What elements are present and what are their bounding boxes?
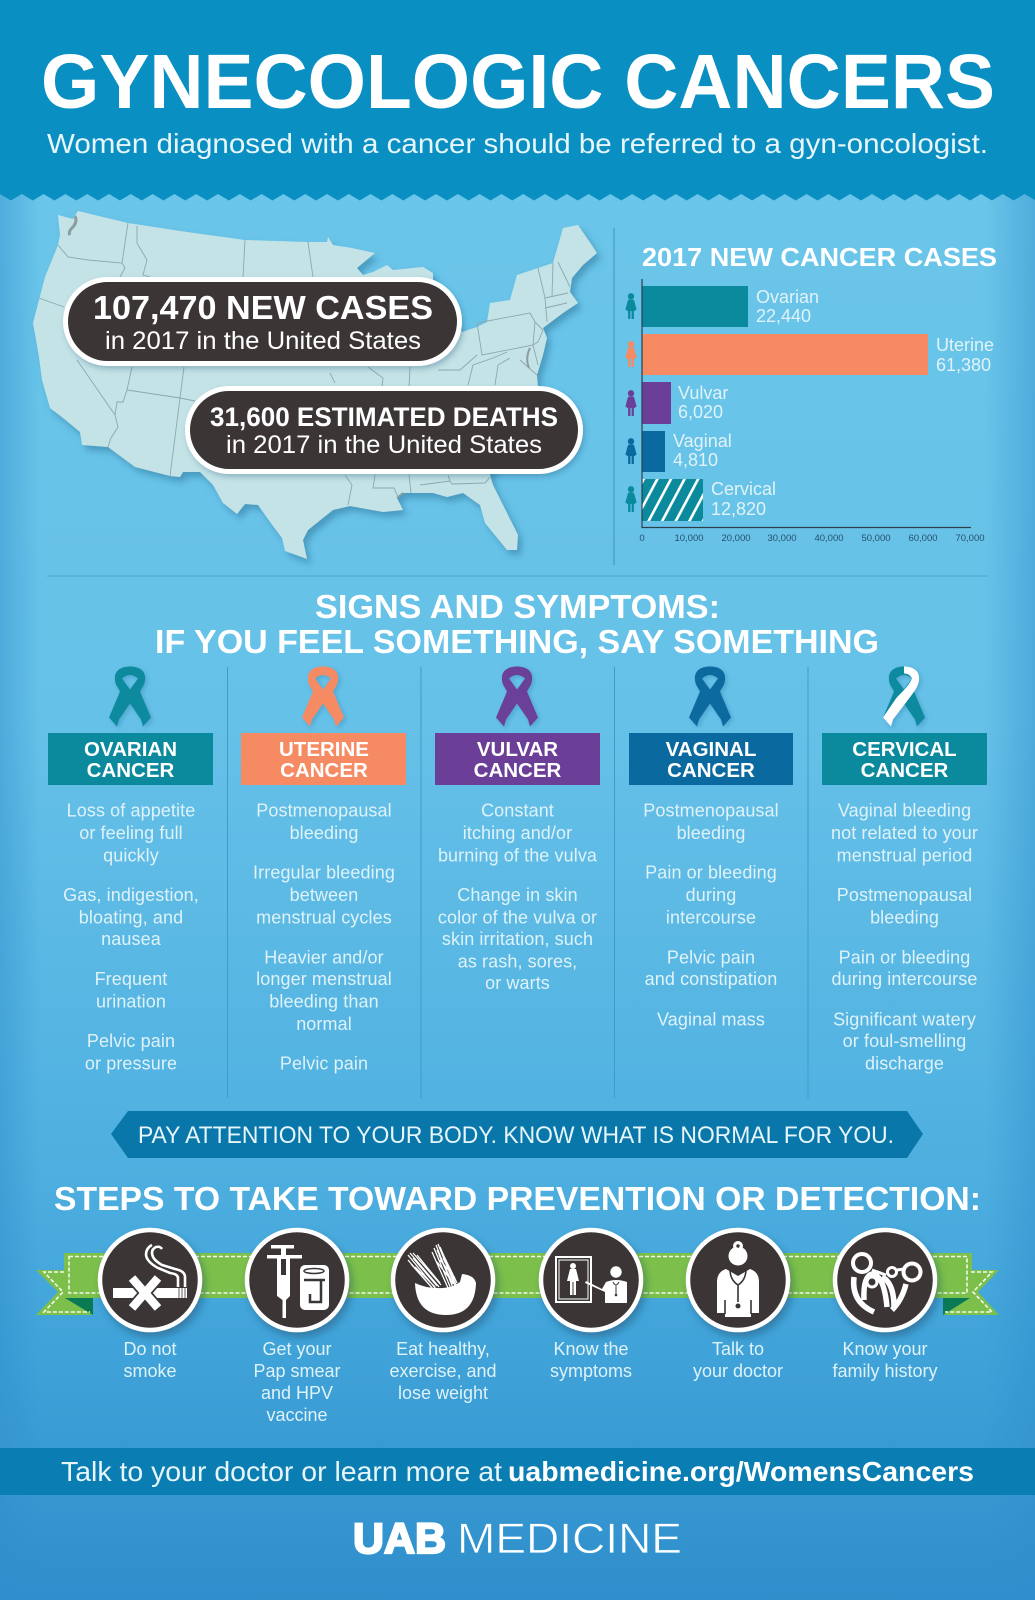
- callout: new cases: 107,470 NEW CASES: [93, 290, 433, 327]
- step: eat healthy: Eat healthy,: [396, 1339, 490, 1359]
- title: GYNECOLOGIC CANCERS: [41, 39, 995, 125]
- ovarian label: CANCER: [87, 759, 175, 782]
- uterine symptoms: bleeding than: [269, 991, 379, 1011]
- cervical symptoms: discharge: [865, 1054, 944, 1074]
- icon: vaginal ribbon: [689, 666, 731, 726]
- bar labels: 6,020: [678, 402, 723, 422]
- cervical symptoms: during intercourse: [832, 969, 977, 989]
- axis labels: 10,000: [674, 533, 704, 544]
- ovarian symptoms: Frequent: [95, 969, 167, 989]
- green ribbon: [36, 1253, 999, 1315]
- ovarian symptoms: urination: [96, 991, 166, 1011]
- vulvar label: [435, 733, 600, 785]
- bar labels: 12,820: [711, 499, 766, 519]
- cervical label: CERVICAL: [852, 738, 957, 761]
- vaginal symptoms: bleeding: [677, 823, 745, 843]
- callout: estimated deaths: [188, 388, 580, 472]
- ovarian symptoms: Gas, indigestion,: [63, 885, 199, 905]
- ovarian symptoms: Loss of appetite: [67, 800, 195, 820]
- icon: cervical ribbon: [883, 666, 925, 726]
- bar labels: Cervical: [711, 479, 776, 499]
- bars: [642, 286, 928, 521]
- icon: doctor and chart: [541, 1230, 641, 1330]
- callout: new cases: in 2017 in the United States: [105, 327, 421, 355]
- vulvar symptoms: itching and/or: [463, 823, 572, 843]
- banner: pay attention: PAY ATTENTION TO YOUR BODY. KNOW WHAT IS NORMAL FOR YOU.: [138, 1122, 894, 1149]
- panel: 2017 new cancer cases chart: [625, 242, 997, 544]
- cervical symptoms: Significant watery: [833, 1010, 976, 1030]
- ovarian symptoms: or feeling full: [79, 823, 183, 843]
- panel: vaginal cancer: [629, 666, 793, 1030]
- icon: doctor: [688, 1230, 788, 1330]
- cervical symptoms: Pain or bleeding: [839, 947, 970, 967]
- logo: UAB Medicine: UAB: [353, 1515, 446, 1563]
- vulvar symptoms: or warts: [485, 973, 550, 993]
- vulvar symptoms: skin irritation, such: [442, 929, 593, 949]
- heading: signs and symptoms: IF YOU FEEL SOMETHING, SAY SOMETHING: [155, 623, 879, 660]
- US map: [33, 211, 597, 559]
- step: pap smear and vaccine: vaccine: [266, 1405, 328, 1425]
- ovarian symptoms: bloating, and: [79, 908, 183, 928]
- bar labels: 22,440: [756, 306, 811, 326]
- cervical label: [822, 733, 987, 785]
- ovarian symptoms: quickly: [103, 845, 159, 865]
- axis labels: 0: [639, 533, 645, 544]
- vulvar symptoms: as rash, sores,: [458, 952, 577, 972]
- axis labels: [639, 533, 985, 544]
- icon: syringe and vial: [247, 1230, 347, 1330]
- panel: cervical cancer: [822, 666, 987, 1074]
- step: pap smear and vaccine: Pap smear: [253, 1361, 341, 1381]
- vaginal symptoms: and constipation: [645, 969, 777, 989]
- bar labels: Uterine: [936, 335, 994, 355]
- step: do not smoke: [100, 1230, 200, 1381]
- person icons: [625, 293, 637, 512]
- heading: steps: STEPS TO TAKE TOWARD PREVENTION OR DETECTION:: [54, 1180, 981, 1217]
- step: pap smear and vaccine: [247, 1230, 347, 1425]
- header band: [0, 0, 1035, 200]
- vulvar symptoms: Constant: [481, 800, 554, 820]
- heading: signs and symptoms: SIGNS AND SYMPTOMS:: [315, 588, 720, 625]
- axes: [642, 279, 971, 528]
- step: eat healthy: [389, 1230, 497, 1403]
- axis labels: 20,000: [721, 533, 751, 544]
- step: talk to your doctor: [688, 1230, 788, 1381]
- step: talk to your doctor: your doctor: [693, 1361, 783, 1381]
- icon: uterine ribbon: [302, 666, 344, 726]
- vaginal symptoms: Pain or bleeding: [645, 863, 777, 883]
- cervical label: CANCER: [861, 759, 949, 782]
- logo: UAB Medicine: MEDICINE: [457, 1515, 682, 1563]
- ovarian symptoms: Pelvic pain: [87, 1031, 175, 1051]
- panel: vulvar cancer: [435, 666, 600, 993]
- uterine symptoms: bleeding: [290, 823, 358, 843]
- axis labels: 40,000: [814, 533, 844, 544]
- step: know family history: Know your: [842, 1339, 928, 1359]
- bar labels: [673, 287, 994, 519]
- ovarian label: [48, 733, 213, 785]
- icon: family: [835, 1230, 935, 1330]
- ovarian symptoms: nausea: [101, 929, 162, 949]
- step: do not smoke: smoke: [123, 1361, 177, 1381]
- step: eat healthy: exercise, and: [389, 1361, 497, 1381]
- banner: pay attention: [111, 1111, 923, 1158]
- chart heading: 2017 NEW CANCER CASES: [642, 242, 997, 272]
- vaginal label: VAGINAL: [666, 738, 756, 761]
- step: pap smear and vaccine: and HPV: [261, 1383, 333, 1403]
- vulvar label: CANCER: [474, 759, 562, 782]
- vaginal symptoms: [643, 800, 779, 1030]
- step: talk to your doctor: Talk to: [712, 1339, 764, 1359]
- step: eat healthy: lose weight: [398, 1383, 488, 1403]
- vulvar label: VULVAR: [477, 738, 558, 761]
- footer call to action: Talk to your doctor or learn more at: [61, 1456, 502, 1487]
- step: pap smear and vaccine: Get your: [262, 1339, 332, 1359]
- panel: ovarian cancer: [48, 666, 213, 1074]
- step: know the symptoms: Know the: [553, 1339, 629, 1359]
- uterine symptoms: Heavier and/or: [264, 947, 384, 967]
- heading: signs and symptoms: [155, 588, 879, 660]
- step: do not smoke: Do not: [123, 1339, 177, 1359]
- ovarian label: OVARIAN: [84, 738, 177, 761]
- cervical symptoms: Vaginal bleeding: [838, 800, 971, 820]
- bar labels: Ovarian: [756, 287, 819, 307]
- uterine symptoms: Irregular bleeding: [253, 863, 395, 883]
- uterine label: [241, 733, 406, 785]
- step: know the symptoms: symptoms: [550, 1361, 632, 1381]
- vaginal symptoms: intercourse: [666, 908, 756, 928]
- cervical symptoms: menstrual period: [837, 845, 972, 865]
- icon: wheat bowl: [393, 1230, 493, 1330]
- bar labels: 61,380: [936, 355, 991, 375]
- vaginal label: CANCER: [667, 759, 755, 782]
- callout: estimated deaths: 31,600 ESTIMATED DEATHS: [210, 402, 558, 432]
- step: know the symptoms: [541, 1230, 641, 1381]
- vaginal label: [629, 733, 793, 785]
- uterine label: UTERINE: [279, 738, 369, 761]
- vaginal symptoms: during: [686, 885, 736, 905]
- uterine symptoms: between: [290, 885, 358, 905]
- uterine symptoms: Postmenopausal: [256, 800, 392, 820]
- uterine symptoms: [253, 800, 395, 1074]
- panel: uterine cancer: [241, 666, 406, 1074]
- axis labels: 50,000: [861, 533, 891, 544]
- icon: ovarian ribbon: [109, 666, 151, 726]
- ovarian symptoms: or pressure: [85, 1054, 177, 1074]
- uterine symptoms: normal: [296, 1014, 352, 1034]
- icon: vulvar ribbon: [496, 666, 538, 726]
- cervical symptoms: bleeding: [870, 908, 939, 928]
- ovarian symptoms: [63, 800, 199, 1074]
- axis labels: 30,000: [767, 533, 797, 544]
- uterine label: CANCER: [280, 759, 368, 782]
- axis labels: 60,000: [908, 533, 938, 544]
- cervical symptoms: not related to your: [831, 823, 978, 843]
- uterine symptoms: longer menstrual: [256, 969, 392, 989]
- vulvar symptoms: color of the vulva or: [438, 908, 597, 928]
- vaginal symptoms: Vaginal mass: [657, 1010, 765, 1030]
- axis labels: 70,000: [955, 533, 985, 544]
- cervical symptoms: or foul-smelling: [843, 1031, 966, 1051]
- bar labels: 4,810: [673, 450, 718, 470]
- vulvar symptoms: [438, 800, 598, 993]
- cervical symptoms: [831, 800, 978, 1074]
- cervical symptoms: Postmenopausal: [837, 885, 972, 905]
- icon: no smoking: [100, 1230, 200, 1330]
- uterine symptoms: Pelvic pain: [280, 1054, 368, 1074]
- vulvar symptoms: Change in skin: [457, 885, 578, 905]
- uterine symptoms: menstrual cycles: [256, 908, 392, 928]
- callout: new cases: [66, 280, 460, 364]
- column dividers: [227, 667, 808, 1098]
- bar labels: Vulvar: [678, 383, 728, 403]
- step: know family history: family history: [832, 1361, 938, 1381]
- subtitle: Women diagnosed with a cancer should be referred to a gyn-oncologist.: [47, 128, 988, 159]
- bar labels: Vaginal: [673, 431, 732, 451]
- vaginal symptoms: Pelvic pain: [667, 947, 755, 967]
- vaginal symptoms: Postmenopausal: [643, 800, 779, 820]
- callout: estimated deaths: in 2017 in the United States: [226, 431, 542, 459]
- divider: chart left: [614, 228, 615, 565]
- step: know family history: [832, 1230, 938, 1381]
- logo: UAB Medicine: [353, 1515, 682, 1563]
- footer call to action: uabmedicine.org/WomensCancers: [508, 1456, 974, 1487]
- divider: section: [47, 576, 988, 577]
- footer call to action: [0, 1448, 1035, 1495]
- vulvar symptoms: burning of the vulva: [438, 845, 598, 865]
